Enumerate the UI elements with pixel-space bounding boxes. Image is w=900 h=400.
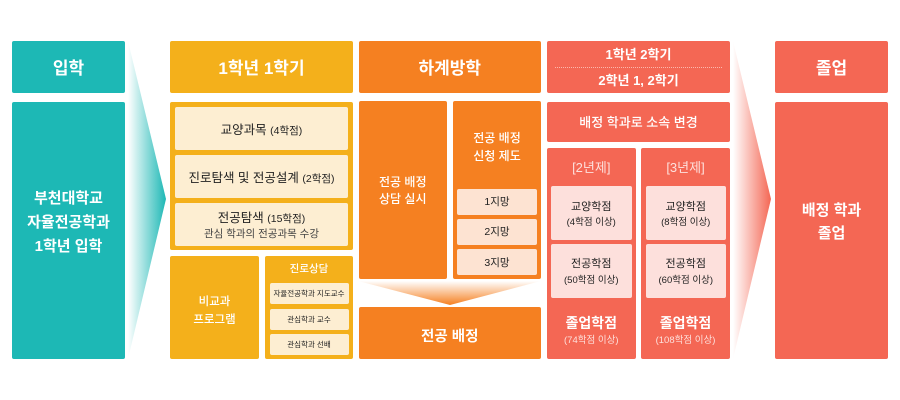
panel: extracurricular program: 프로그램 bbox=[193, 314, 236, 326]
credits: major: 전공학점 bbox=[571, 258, 611, 270]
semester line 2: 2학년 1, 2학기 bbox=[598, 73, 679, 88]
arrow: admission to first semester bbox=[128, 41, 166, 359]
heading: winter break bbox=[358, 41, 541, 93]
application title: 전공 배정 bbox=[473, 131, 521, 145]
credits: liberal arts: (4학점 이상) bbox=[567, 217, 616, 228]
heading: graduation: 졸업 bbox=[816, 59, 847, 78]
panel: admission: 부천대학교 bbox=[34, 190, 103, 207]
arrow: down to major assignment bbox=[358, 281, 541, 305]
panel: admission: 1학년 입학 bbox=[35, 238, 102, 255]
credits: graduation: (74학점 이상) bbox=[564, 335, 618, 346]
counseling title: 진로상담 bbox=[290, 263, 328, 275]
counselor: advisor bbox=[270, 283, 348, 304]
dotted separator bbox=[555, 67, 722, 68]
panel: three-year course bbox=[641, 148, 730, 359]
course: liberal arts bbox=[175, 106, 348, 150]
course: career exploration bbox=[175, 154, 348, 198]
application title bbox=[473, 131, 521, 162]
credits: major bbox=[551, 244, 632, 298]
counselor: senior bbox=[270, 334, 348, 355]
semester line 1: 1학년 2학기 bbox=[606, 47, 671, 62]
credits: liberal arts bbox=[551, 186, 632, 240]
heading: graduation bbox=[775, 41, 888, 93]
panel: department change: 배정 학과로 소속 변경 bbox=[579, 115, 698, 130]
credits: graduation bbox=[656, 315, 715, 346]
credits: major bbox=[646, 244, 726, 298]
panel: two-year course bbox=[547, 148, 636, 359]
credits: graduation: 졸업학점 bbox=[660, 315, 711, 331]
panel: major assignment bbox=[358, 307, 541, 359]
panel: career counseling bbox=[265, 256, 353, 359]
course: career exploration: 진로탐색 및 전공설계 (2학점) bbox=[188, 171, 335, 185]
credits: major: (60학점 이상) bbox=[658, 274, 713, 286]
heading: admission bbox=[12, 41, 125, 93]
credits: graduation: (108학점 이상) bbox=[656, 335, 715, 346]
panel: graduation: 배정 학과 bbox=[802, 202, 861, 219]
course: major exploration: 전공탐색 (15학점) bbox=[218, 211, 305, 225]
panel: graduation: 졸업 bbox=[818, 225, 845, 242]
heading: later semesters bbox=[547, 41, 730, 93]
panel: first semester courses bbox=[170, 102, 353, 250]
credits: major: 전공학점 bbox=[666, 258, 706, 270]
credits: liberal arts: 교양학점 bbox=[571, 200, 611, 212]
panel: major assignment: 전공 배정 bbox=[421, 328, 478, 344]
heading: admission: 입학 bbox=[53, 59, 84, 78]
panel: extracurricular program: 비교과 bbox=[199, 296, 230, 308]
panel: graduation bbox=[775, 102, 888, 359]
label: three-year: [3년제] bbox=[666, 160, 705, 175]
credits: liberal arts bbox=[646, 186, 726, 240]
panel: major application bbox=[453, 101, 541, 279]
heading: winter break: 하계방학 bbox=[418, 59, 481, 78]
heading: first semester: 1학년 1학기 bbox=[218, 59, 305, 78]
course: liberal arts: 교양과목 (4학점) bbox=[221, 123, 302, 137]
choice 3 bbox=[457, 249, 537, 275]
credits: liberal arts: (8학점 이상) bbox=[661, 217, 710, 228]
heading: first semester bbox=[170, 41, 353, 93]
panel: admission: 자율전공학과 bbox=[27, 214, 110, 231]
panel: admission bbox=[12, 102, 125, 359]
choice 1 bbox=[457, 189, 537, 214]
counselor: professor bbox=[270, 309, 348, 330]
label: two-year: [2년제] bbox=[572, 160, 610, 175]
counselor: professor: 관심학과 교수 bbox=[287, 315, 331, 324]
credits: liberal arts: 교양학점 bbox=[666, 200, 706, 212]
credits: graduation: 졸업학점 bbox=[565, 315, 617, 331]
arrow: to graduation bbox=[733, 41, 771, 359]
panel: extracurricular program bbox=[170, 256, 259, 359]
counselor: advisor: 자율전공학과 지도교수 bbox=[273, 289, 345, 298]
choice 2: 2지망 bbox=[484, 226, 510, 238]
credits: major: (50학점 이상) bbox=[564, 274, 618, 286]
panel: major counseling: 전공 배정 bbox=[379, 174, 426, 188]
course: major exploration bbox=[175, 202, 348, 246]
application title: 신청 제도 bbox=[473, 148, 521, 162]
panel: department change bbox=[547, 102, 730, 142]
choice 1: 1지망 bbox=[484, 196, 510, 208]
course: major exploration: 관심 학과의 전공과목 수강 bbox=[204, 228, 319, 240]
counselor: senior: 관심학과 선배 bbox=[287, 340, 331, 349]
choice 2 bbox=[457, 219, 537, 244]
choice 3: 3지망 bbox=[484, 256, 510, 268]
panel: major counseling bbox=[358, 101, 447, 279]
panel: major counseling: 상담 실시 bbox=[379, 192, 426, 206]
credits: graduation bbox=[564, 315, 618, 346]
